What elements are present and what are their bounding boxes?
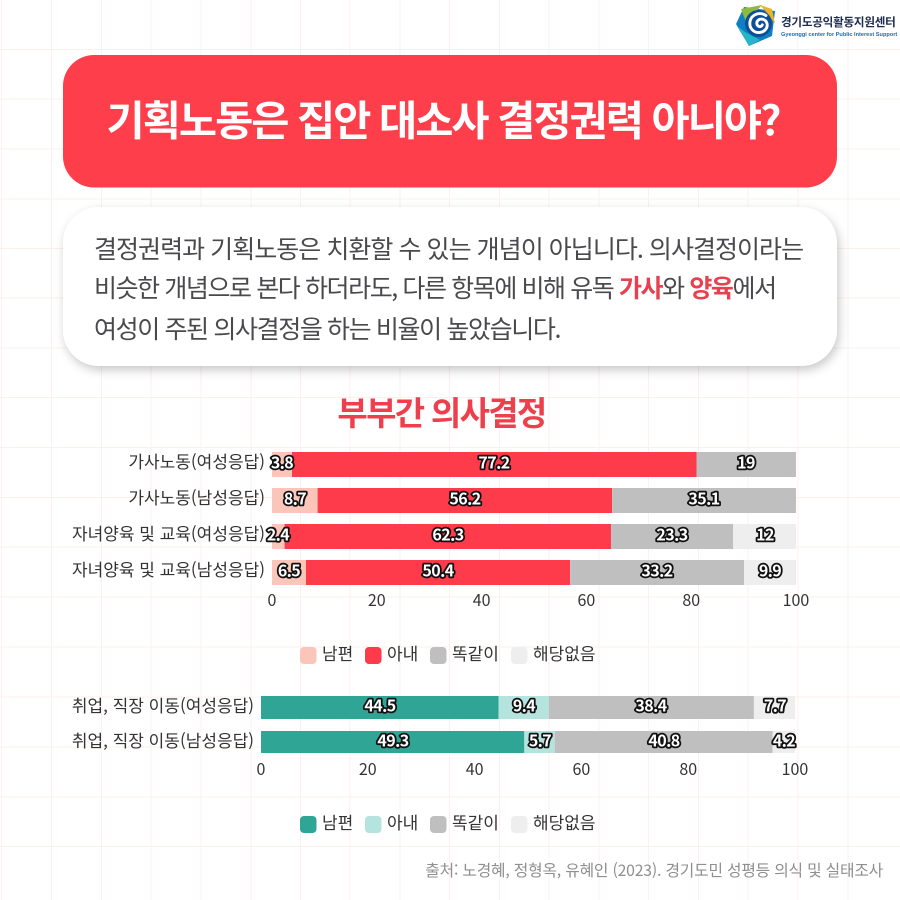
chart heading: 부부간 의사결정 (337, 387, 546, 435)
row: job change, female respondents: 취업, 직장 이동(여성응답) (72, 692, 254, 717)
logo (736, 5, 897, 46)
row: housework, female respondents: 19 (737, 450, 755, 474)
axis ticks: 0 (257, 756, 266, 780)
row: childcare, male respondents: 33.2 (641, 558, 673, 582)
row: childcare, male respondents (72, 556, 796, 585)
row: housework, female respondents (128, 448, 796, 477)
row: housework, male respondents: 35.1 (688, 486, 720, 510)
axis ticks: 20 (359, 756, 377, 780)
title banner (63, 55, 837, 188)
icon: logo spiral (736, 5, 775, 46)
row: job change, male respondents (72, 727, 795, 753)
text: explanation line 1: 결정권력과 기획노동은 치환할 수 있는 개념이 아닙니다. 의사결정이라는 (94, 230, 803, 266)
legend: chart 2 (300, 809, 596, 834)
panel: explanation (63, 207, 837, 366)
chart: decision making, household and childcare (72, 448, 809, 611)
axis ticks (268, 587, 809, 611)
legend: chart 1 (300, 640, 596, 665)
legend: chart 1: 똑같이 (452, 640, 499, 665)
row: job change, female respondents: 7.7 (764, 692, 786, 716)
legend: chart 1: 아내 (387, 640, 418, 665)
text: explanation line 3: 여성이 주된 의사결정을 하는 비율이 높았습니다. (94, 310, 561, 346)
row: job change, male respondents: 49.3 (377, 728, 409, 752)
row: housework, male respondents: 가사노동(남성응답) (128, 484, 265, 509)
row: childcare, male respondents: 6.5 (278, 558, 300, 582)
axis ticks: 40 (473, 587, 491, 611)
axis ticks: 40 (466, 756, 484, 780)
row: job change, male respondents: 5.7 (529, 728, 551, 752)
row: childcare, male respondents: 9.9 (759, 558, 781, 582)
row: childcare, male respondents: 자녀양육 및 교육(남성응답) (72, 556, 265, 581)
logo name: 경기도공익활동지원센터 (781, 14, 896, 30)
row: housework, male respondents (128, 484, 796, 513)
legend: chart 1: 남편 (322, 640, 353, 665)
axis ticks: 60 (573, 756, 590, 780)
row: job change, female respondents: 38.4 (635, 692, 667, 716)
axis ticks: 80 (679, 756, 697, 780)
source note: 출처: 노경혜, 정형옥, 유혜인 (2023). 경기도민 성평등 의식 및 실태조사 (425, 858, 884, 881)
axis ticks: 100 (783, 587, 809, 611)
row: housework, female respondents: 가사노동(여성응답) (128, 448, 265, 473)
row: childcare, female respondents (72, 520, 796, 549)
row: job change, female respondents (72, 692, 795, 719)
row: housework, male respondents: 8.7 (284, 486, 306, 510)
row: childcare, female respondents: 12 (756, 522, 774, 546)
row: childcare, female respondents: 자녀양육 및 교육(여성응답) (72, 520, 265, 545)
row: job change, female respondents: 44.5 (364, 692, 396, 716)
row: job change, male respondents: 취업, 직장 이동(남성응답) (72, 727, 254, 752)
row: housework, female respondents: 77.2 (478, 450, 510, 474)
legend: chart 1: 해당없음 (533, 640, 596, 665)
legend: chart 2: 해당없음 (533, 809, 596, 834)
axis ticks: 60 (578, 587, 595, 611)
axis ticks (257, 756, 808, 780)
row: childcare, female respondents: 23.3 (656, 522, 688, 546)
chart: decision making, employment (72, 692, 808, 780)
axis ticks: 0 (268, 587, 277, 611)
row: housework, female respondents: 3.8 (271, 450, 293, 474)
axis ticks: 80 (682, 587, 700, 611)
row: childcare, female respondents: 62.3 (432, 522, 464, 546)
row: housework, male respondents: 56.2 (449, 486, 481, 510)
row: job change, male respondents: 40.8 (648, 728, 680, 752)
axis ticks: 20 (368, 587, 386, 611)
title: 기획노동은 집안 대소사 결정권력 아니야? (107, 88, 780, 148)
row: childcare, male respondents: 50.4 (422, 558, 454, 582)
legend: chart 2: 아내 (387, 809, 418, 834)
axis ticks: 100 (782, 756, 808, 780)
row: job change, male respondents: 4.2 (773, 728, 795, 752)
legend: chart 2: 똑같이 (452, 809, 499, 834)
text: explanation line 2: 비슷한 개념으로 본다 하더라도, 다른 항목에 비해 유독 가사와 양육에서 (94, 269, 776, 305)
logo english name: Gyeonggi center for Public Interest Support (781, 32, 897, 38)
legend: chart 2: 남편 (322, 809, 353, 834)
row: childcare, female respondents: 2.4 (267, 522, 289, 546)
row: job change, female respondents: 9.4 (513, 692, 535, 716)
